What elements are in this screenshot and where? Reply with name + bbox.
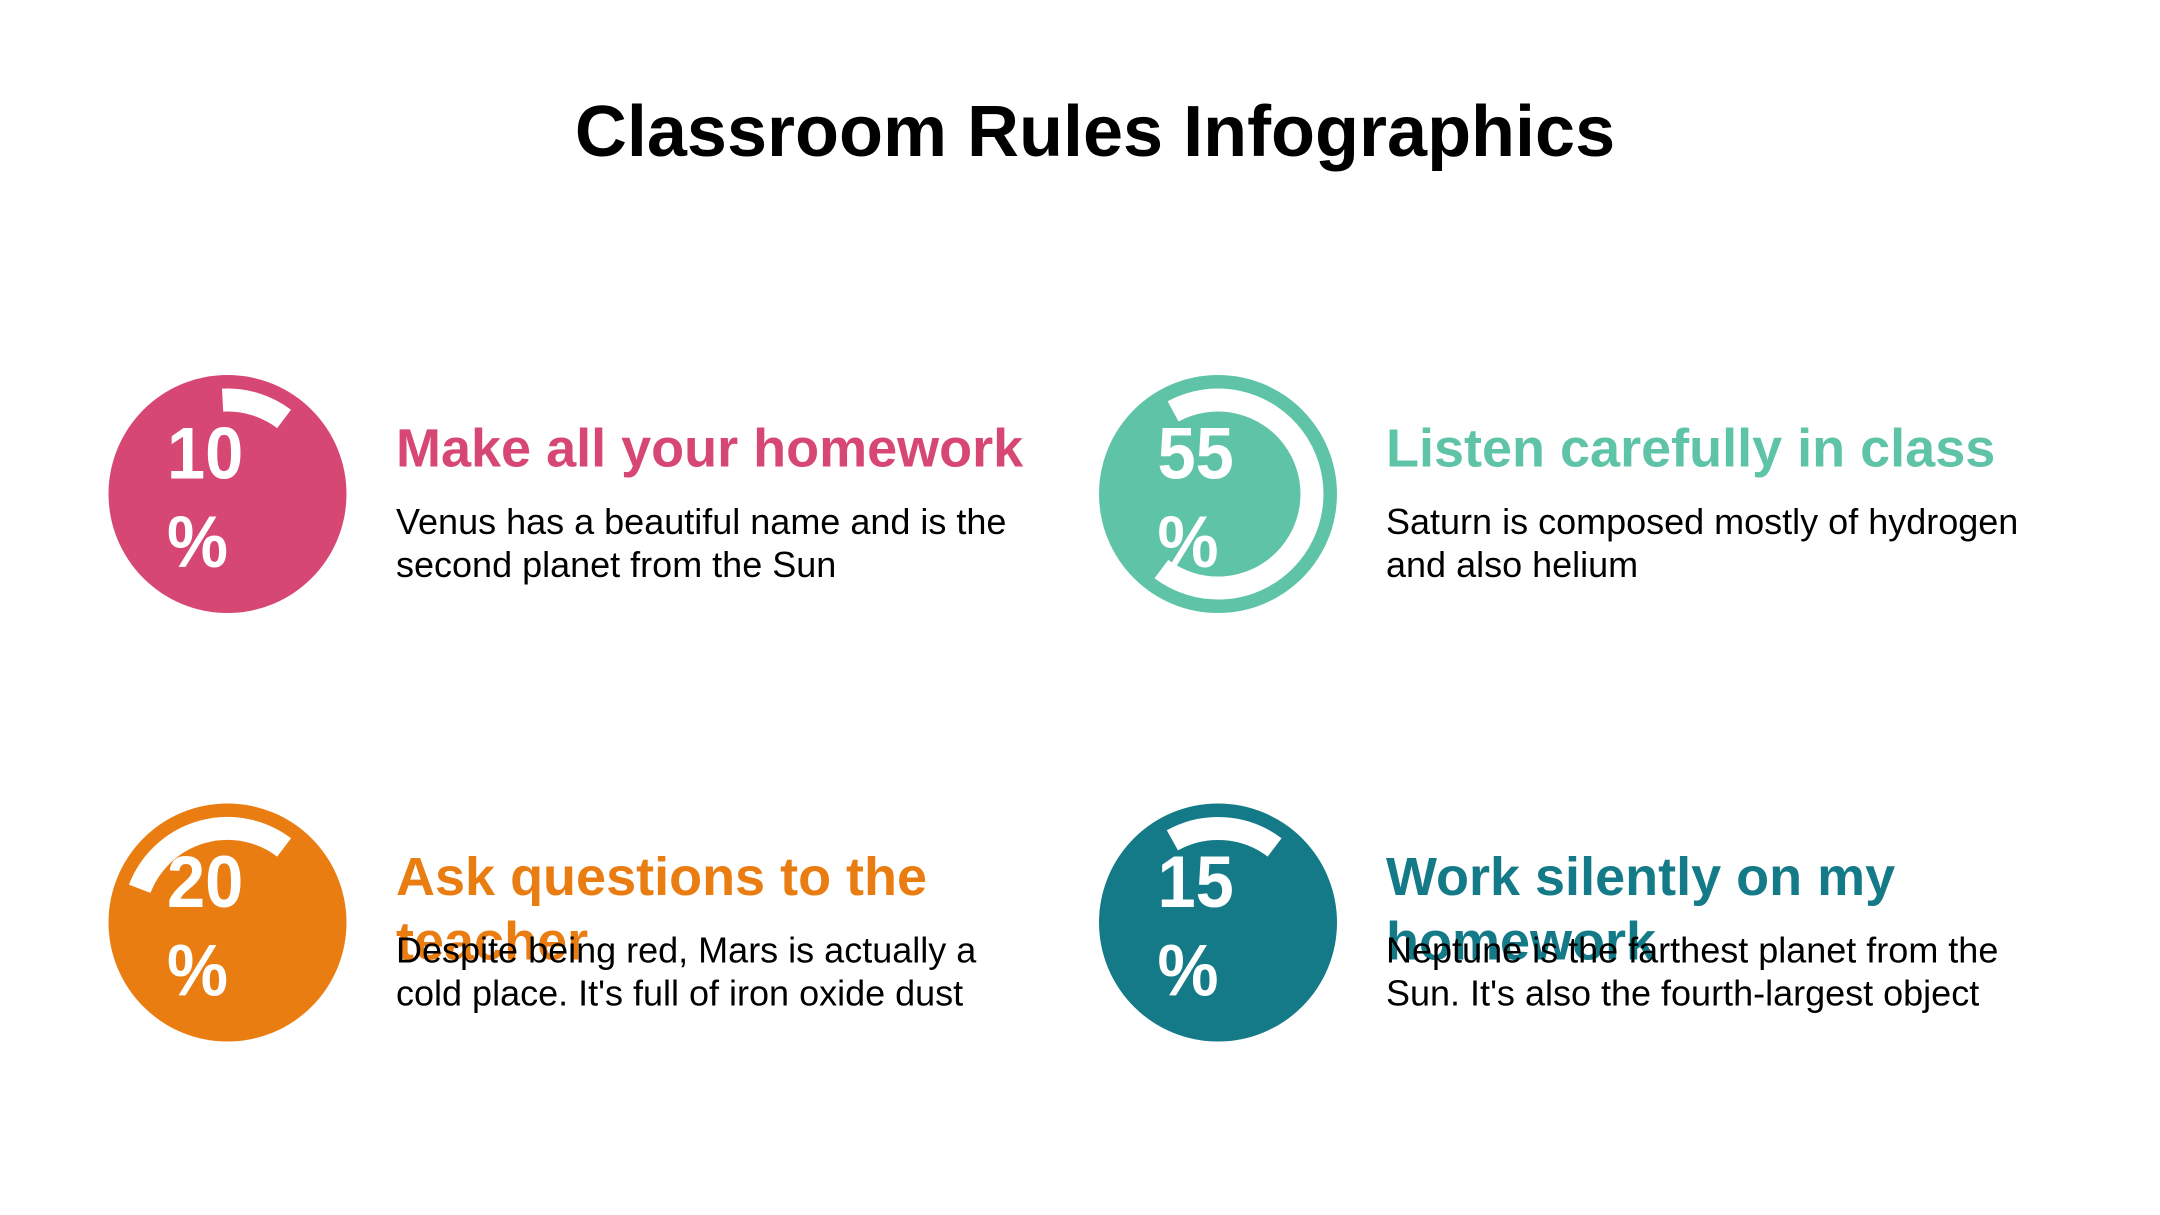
icon: 20% progress circle: % <box>167 931 228 1012</box>
heading: work silently on my homework: Work silently on my <box>1386 847 1895 907</box>
icon: 10% progress circle: 10 <box>167 414 243 495</box>
heading: listen carefully in class: Listen carefully in class <box>1386 418 1995 478</box>
icon: 20% progress circle <box>108 804 346 1042</box>
icon: 55% progress circle <box>1099 375 1337 613</box>
icon: 10% progress circle <box>108 375 346 613</box>
heading: work silently on my homework: homework <box>1386 912 1657 972</box>
text: saturn description: and also helium <box>1386 544 1638 585</box>
heading: make all your homework: Make all your homework <box>396 418 1024 478</box>
icon: 20% progress circle: 20 <box>167 842 243 923</box>
icon: 10% progress circle: % <box>167 502 228 583</box>
panel: ask questions to the teacher <box>108 804 977 1042</box>
title: Classroom Rules Infographics <box>575 92 1615 172</box>
text: venus description: second planet from the Sun <box>396 544 836 585</box>
icon: 55% progress circle: % <box>1158 502 1219 583</box>
heading: ask questions to the teacher: teacher <box>396 912 588 972</box>
text: neptune description: Sun. It's also the fourth-largest object <box>1386 972 1979 1014</box>
panel: listen carefully in class <box>1099 375 2018 613</box>
panel: work silently on my homework <box>1099 804 1998 1042</box>
icon: 15% progress circle <box>1099 804 1337 1042</box>
icon: 15% progress circle: % <box>1158 931 1219 1012</box>
panel: make all your homework <box>108 375 1024 613</box>
text: venus description: Venus has a beautiful name and is the <box>396 501 1006 542</box>
text: saturn description: Saturn is composed mostly of hydrogen <box>1386 501 2018 542</box>
icon: 15% progress circle: 15 <box>1158 842 1234 923</box>
text: neptune description: Neptune is the farthest planet from the <box>1386 930 1998 970</box>
icon: 55% progress circle: 55 <box>1158 414 1234 495</box>
text: mars description: cold place. It's full of iron oxide dust <box>396 972 963 1014</box>
text: mars description: Despite being red, Mars is actually a <box>396 930 976 970</box>
heading: ask questions to the teacher: Ask questions to the <box>396 847 927 907</box>
